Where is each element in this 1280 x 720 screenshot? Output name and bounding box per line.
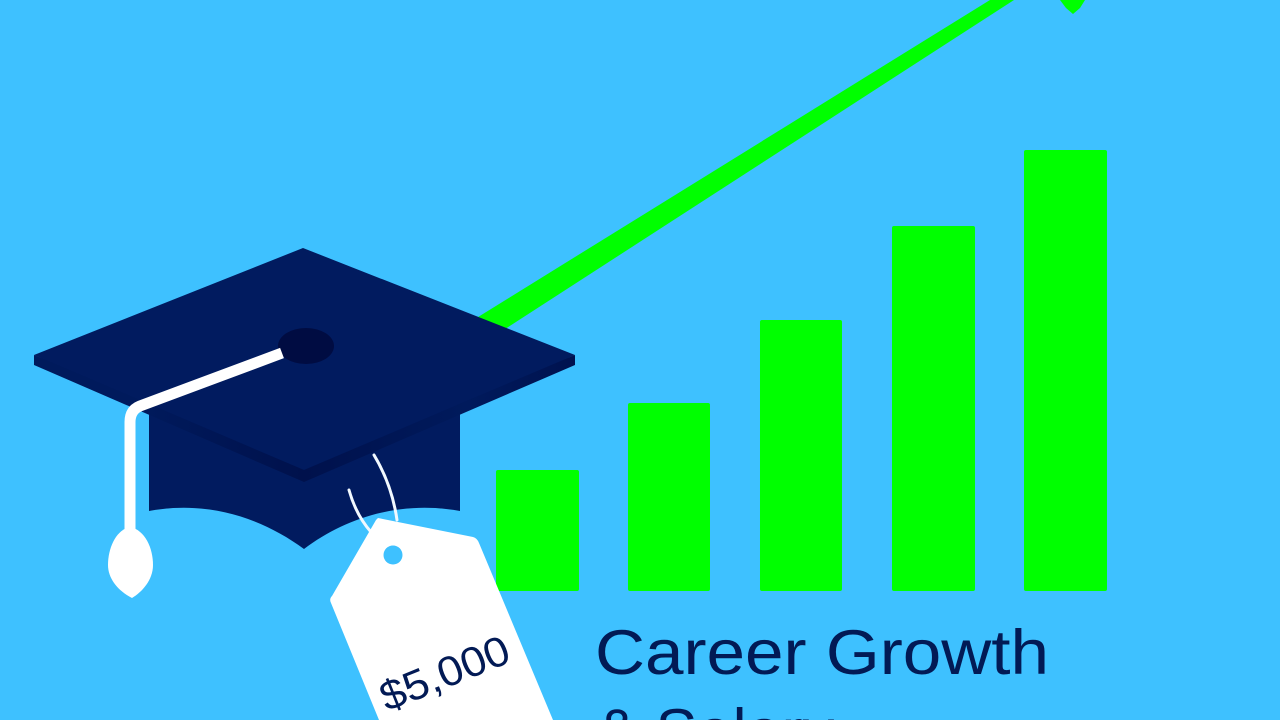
bar chart: career growth (496, 150, 1107, 591)
tag body (330, 518, 553, 720)
arrow: rising growth trend (470, 0, 1085, 331)
tassel strap (130, 353, 282, 535)
cap board shadow (34, 355, 575, 482)
cap board (34, 248, 575, 470)
icon: graduation cap (34, 248, 575, 598)
tag price: $5,000 (373, 626, 516, 720)
tassel end (108, 527, 153, 598)
cap base (149, 405, 460, 549)
tag strings (349, 455, 397, 532)
title: Career Growth (595, 618, 1049, 688)
cap button (278, 328, 334, 364)
tag hole (384, 546, 402, 564)
price tag (330, 455, 553, 720)
